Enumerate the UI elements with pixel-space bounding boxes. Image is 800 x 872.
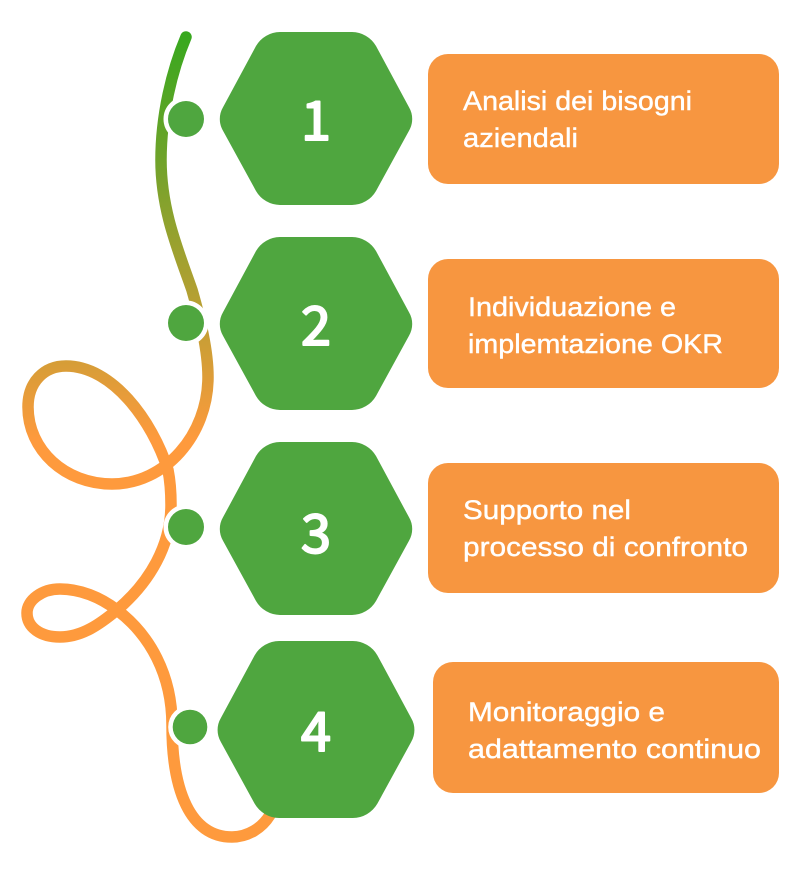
step 2 hexagon — [220, 237, 412, 410]
step 4 label: adattamento continuo — [468, 734, 761, 764]
step 1 — [168, 32, 779, 205]
step 1 hexagon — [220, 32, 412, 205]
step 2 — [168, 237, 779, 410]
step 2 label: implemtazione OKR — [468, 329, 723, 359]
step 4 label: Monitoraggio e — [468, 697, 665, 727]
step 3 label: Supporto nel — [463, 495, 631, 525]
step 4 number: 4 — [301, 688, 331, 767]
step 3 card — [428, 463, 779, 593]
step 1 label: Analisi dei bisogni — [463, 86, 692, 116]
step 1 label: aziendali — [463, 123, 578, 153]
step 2 label: Individuazione e — [468, 292, 676, 322]
step 3 number: 3 — [301, 490, 331, 569]
step 2 marker dot — [168, 305, 204, 341]
step 4 hexagon — [218, 641, 414, 818]
step 1 number: 1 — [301, 77, 331, 156]
step 1 marker dot — [168, 101, 204, 137]
step 3 marker dot — [168, 509, 204, 545]
step 4 — [173, 641, 779, 818]
step 3 label: processo di confronto — [463, 532, 748, 562]
step 4 card — [433, 662, 779, 793]
step 2 number: 2 — [301, 282, 331, 361]
curved timeline path — [27, 37, 270, 837]
step 2 card — [428, 259, 779, 388]
step 1 card — [428, 54, 779, 184]
step 3 — [168, 442, 779, 615]
step 4 marker dot — [173, 710, 207, 744]
step 3 hexagon — [220, 442, 412, 615]
